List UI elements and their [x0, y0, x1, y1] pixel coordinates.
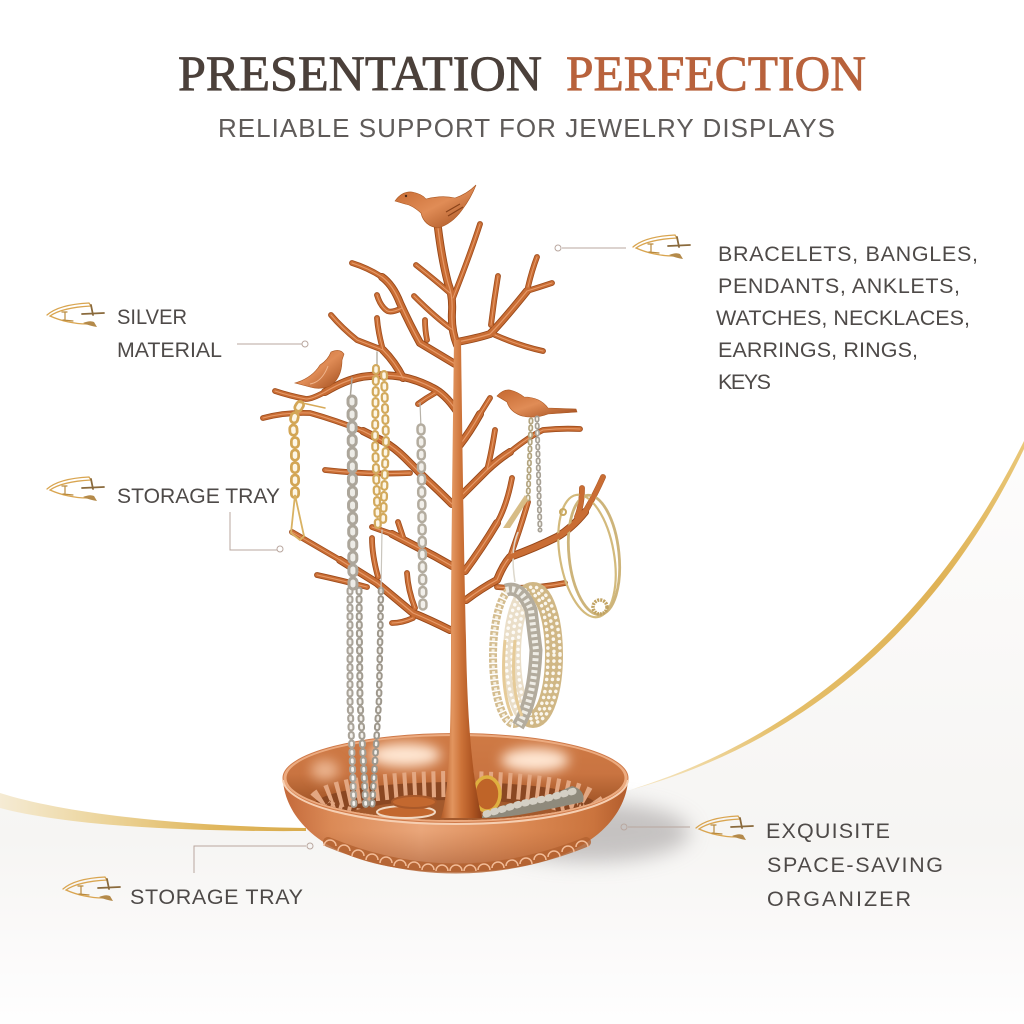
silver chain upper strand	[350, 378, 353, 590]
text: exquisite organizer	[766, 819, 943, 911]
right chains	[503, 418, 540, 582]
items in tray	[377, 777, 584, 818]
tree branches	[263, 224, 603, 630]
text: silver material: SILVER	[117, 305, 187, 329]
icon: bird emblem	[47, 477, 104, 501]
tray body	[283, 780, 628, 872]
text: jewelry list: PENDANTS, ANKLETS,	[718, 274, 960, 298]
tray rim highlight	[283, 780, 628, 824]
tray scalloped edge	[324, 840, 588, 871]
label: jewelry types	[555, 235, 978, 394]
text: exquisite organizer: ORGANIZER	[767, 887, 911, 911]
lower silver chains	[350, 590, 381, 810]
label: storage tray left	[47, 477, 283, 552]
tray interior	[282, 733, 628, 823]
text: silver material	[117, 305, 222, 362]
leader line	[555, 245, 626, 251]
thin gold bangles	[550, 490, 625, 622]
icon: bird emblem	[696, 816, 753, 840]
text: jewelry list: BRACELETS, BANGLES,	[718, 242, 978, 266]
leader line	[621, 824, 690, 830]
silver chain short	[420, 403, 423, 610]
text: silver material: MATERIAL	[117, 338, 222, 362]
text: storage tray: STORAGE TRAY	[130, 885, 303, 909]
gold arc left	[0, 793, 306, 831]
tree trunk	[441, 340, 482, 818]
label: silver material	[47, 303, 308, 362]
label: space-saving organizer	[621, 816, 943, 911]
right bird	[497, 390, 577, 417]
branch over bangles	[510, 477, 603, 557]
beaded bangles	[493, 587, 560, 726]
bowl shadow	[490, 802, 690, 862]
text: jewelry list	[716, 242, 978, 394]
text: jewelry list: WATCHES, NECKLACES,	[716, 306, 970, 330]
title: PRESENTATION	[178, 45, 542, 101]
leader line	[230, 512, 283, 552]
left bird	[295, 350, 344, 388]
text: exquisite organizer: SPACE-SAVING	[767, 853, 943, 877]
text: exquisite organizer: EXQUISITE	[766, 819, 890, 843]
text: jewelry list: KEYS	[718, 370, 771, 394]
jewelry tree stand	[263, 185, 628, 872]
subtitle: RELIABLE SUPPORT FOR JEWELRY DISPLAYS	[218, 113, 835, 143]
leader line	[194, 843, 313, 873]
icon: bird emblem	[47, 303, 104, 327]
top bird	[395, 185, 476, 228]
text: jewelry list: EARRINGS, RINGS,	[718, 338, 918, 362]
title: PERFECTION	[566, 45, 866, 101]
gold arc right	[630, 441, 1024, 790]
label: storage tray bottom	[63, 843, 313, 909]
tray	[283, 734, 628, 872]
gold chain far left	[291, 402, 325, 540]
text: storage tray: STORAGE TRAY	[117, 484, 280, 508]
gold chain center	[375, 352, 386, 592]
title	[178, 45, 866, 101]
icon: bird emblem	[63, 877, 120, 901]
leader line	[237, 341, 308, 347]
icon: bird emblem	[633, 235, 690, 259]
